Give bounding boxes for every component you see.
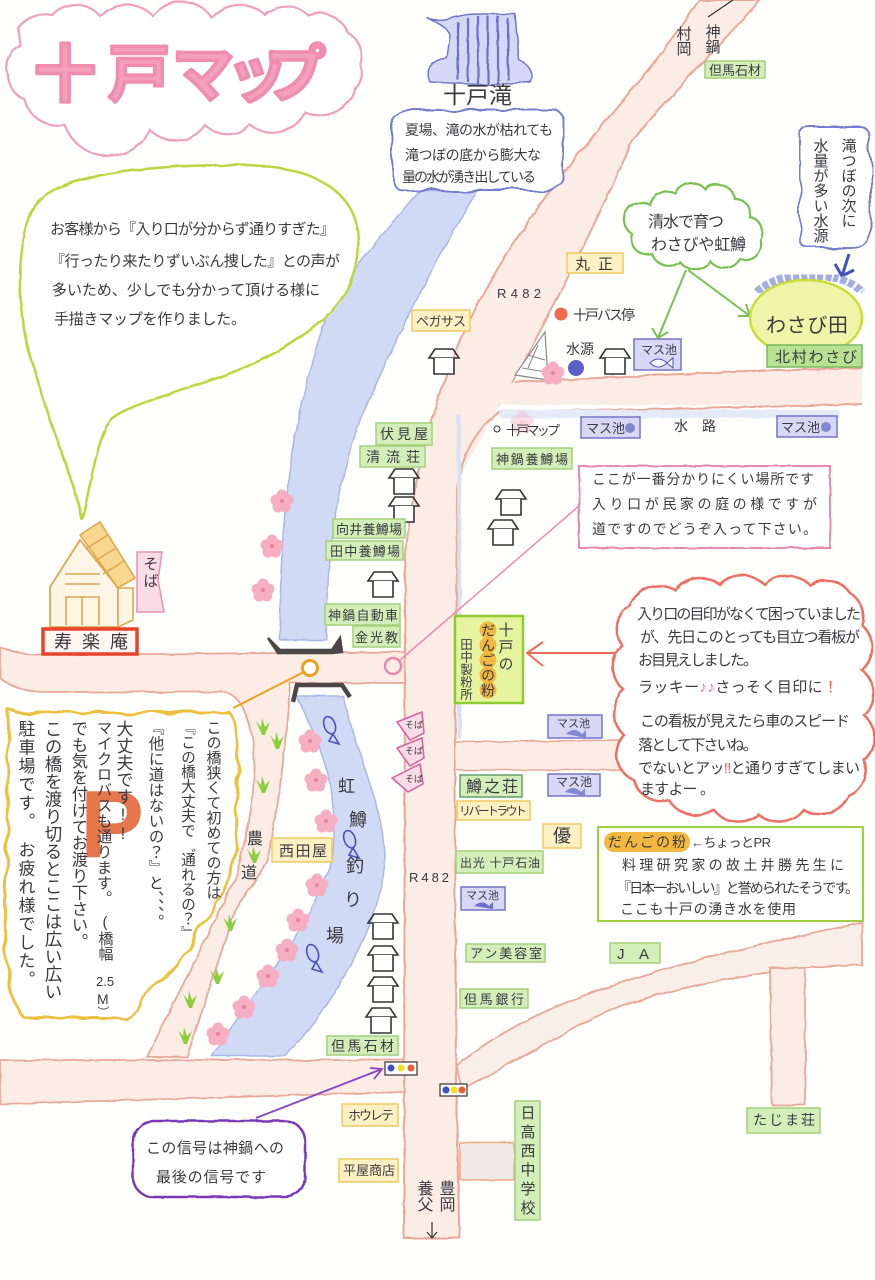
label: 伏見屋 <box>376 423 432 445</box>
grass sprigs <box>178 718 284 1044</box>
pink pointer <box>385 505 580 674</box>
label: ペガサス <box>412 310 470 331</box>
blue bubble: second water source: 滝つぼの次に <box>840 138 856 228</box>
yellow bubble: この橋を渡り切るとここは広い広い <box>43 720 63 1000</box>
dango flour sign: だんごの粉 <box>480 623 496 698</box>
yellow bubble: 『この橋大丈夫で゛通れるの？』 <box>179 720 195 940</box>
PR box: 料理研究家の故土井勝先生に <box>622 857 844 873</box>
yellow bubble: ） <box>96 1006 110 1018</box>
restaurant Jurakuan: 寿楽庵 <box>54 632 128 652</box>
label: マス池 lower: マス池 <box>466 889 499 902</box>
red callout cloud: 入り口の目印がなくて困っていました <box>637 606 861 623</box>
fishing spot label: 鱒 <box>349 810 367 830</box>
label: マス池 cross road north <box>548 715 602 738</box>
label: ペガサス: ペガサス <box>416 314 466 329</box>
cherry blossoms upper <box>252 490 294 602</box>
label: たじま荘 <box>747 1108 820 1133</box>
branch road to wasabi field <box>458 368 862 480</box>
pink note box: 道ですのでどうぞ入って下さい。 <box>592 521 817 537</box>
arrows from cloud <box>652 270 750 338</box>
dango flour sign: 十戸の <box>496 622 514 673</box>
label: 但馬銀行 <box>460 989 528 1008</box>
restaurant Jurakuan: そば <box>142 556 158 590</box>
label: アン美容室: アン美容室 <box>470 946 542 961</box>
label: 神鍋養鱒場: 神鍋養鱒場 <box>496 452 568 467</box>
callout: waterfall note: 量の水が湧き出している <box>402 169 536 185</box>
house <box>429 349 459 374</box>
label: 平屋商店 <box>339 1159 398 1182</box>
PR box: ここも十戸の湧き水を使用 <box>620 901 796 917</box>
waterfall name: 十戸滝 <box>443 82 512 108</box>
red callout cloud: が、先日このとっても目立つ看板が <box>640 629 860 646</box>
direction to Kannabe: 神鍋 <box>704 24 720 54</box>
label: マス池 cross road south: マス池 <box>556 775 592 789</box>
PR box: ←ちょっとPR <box>691 835 771 850</box>
red callout cloud: 落として下さいね。 <box>638 737 758 754</box>
pink note box <box>579 466 830 548</box>
label: マス池 upper <box>634 339 681 370</box>
houses row <box>366 914 398 1033</box>
label: 出光 十戸石油: 出光 十戸石油 <box>460 856 540 870</box>
cloud: spring water: 清水で育つ <box>648 213 724 231</box>
label: 清流荘: 清流荘 <box>366 449 420 465</box>
purple callout <box>133 1121 305 1197</box>
south direction: 養父 <box>414 1180 434 1212</box>
label: 但馬石材 top: 但馬石材 <box>709 63 761 78</box>
十戸マップ marker <box>494 410 560 438</box>
south direction: 豊岡 <box>436 1180 456 1213</box>
label: マス池 east: マス池 <box>781 420 820 435</box>
label: 金光教 <box>353 626 400 647</box>
label: マス池 cross road north: マス池 <box>557 717 590 730</box>
waterfall icon <box>427 14 532 85</box>
direction to Kannabe <box>674 0 733 57</box>
fish in river <box>304 715 359 972</box>
label: ホウレテ: ホウレテ <box>348 1108 394 1123</box>
label: マス池 east <box>777 416 837 437</box>
label: マス池 upper: マス池 <box>641 343 677 357</box>
label: 清流荘 <box>360 446 425 467</box>
label: 優 <box>543 824 581 848</box>
十戸マップ marker: 十戸マップ <box>506 423 560 438</box>
cloud: spring water <box>624 183 762 270</box>
label: 北村わさび <box>767 345 862 367</box>
label: 神鍋自動車 <box>325 604 400 625</box>
label: JA <box>610 943 660 963</box>
label: 神鍋自動車: 神鍋自動車 <box>328 608 398 623</box>
branch to school <box>460 1143 514 1180</box>
cherry blossoms lower <box>206 730 338 1046</box>
farm road label: 農 <box>247 830 263 848</box>
callout: waterfall note <box>393 110 563 190</box>
label: リバートラウト: リバートラウト <box>459 804 527 818</box>
purple arrow <box>256 1068 382 1118</box>
east cross road <box>455 740 620 770</box>
callout: waterfall note: 夏場、滝の水が枯れても <box>405 122 553 138</box>
dango flour sign <box>455 616 523 703</box>
road label R482 north: R482 <box>497 286 541 301</box>
south-east road <box>456 922 862 1090</box>
callout: waterfall note: 滝つぼの底から膨大な <box>405 147 541 163</box>
blue bubble: second water source <box>800 127 870 249</box>
speech balloon: intro: 多いため、少しでも分かって頂ける様に <box>52 281 320 299</box>
label: リバートラウト <box>457 801 530 820</box>
restaurant Jurakuan <box>43 522 164 654</box>
purple callout: 最後の信号です <box>156 1169 266 1186</box>
soba flags: そば <box>405 774 423 784</box>
label: ホウレテ <box>342 1104 398 1126</box>
label: 丸正 <box>567 253 623 273</box>
fishing spot label: 虹 <box>338 777 355 796</box>
label: 但馬銀行: 但馬銀行 <box>464 992 524 1007</box>
label: 鱒之荘: 鱒之荘 <box>466 778 518 796</box>
branch to Tajimaso <box>770 968 805 1105</box>
orange pointer <box>233 660 318 708</box>
label: 向井養鱒場: 向井養鱒場 <box>336 522 402 537</box>
fishing spot label <box>326 777 367 946</box>
label: 出光 十戸石油 <box>456 851 543 873</box>
road label R482 south: R482 <box>409 870 449 885</box>
title text: 十戸マップ <box>34 24 326 114</box>
red arrow <box>527 642 618 666</box>
wasabi field: わさび田 <box>766 314 848 337</box>
arrow to wasabi field <box>835 254 854 276</box>
red callout cloud: この看板が見えたら車のスピード <box>640 713 850 730</box>
PR box: だんごの粉 <box>608 834 686 850</box>
fishing spot label: 場 <box>326 926 344 946</box>
label: マス池 lower <box>461 887 505 910</box>
label: 神鍋養鱒場 <box>492 448 572 469</box>
label: 鱒之荘 <box>460 775 522 797</box>
label: マス池 cross road south <box>548 774 600 796</box>
pink note box: ここが一番分かりにくい場所です <box>592 471 814 487</box>
label: 金光教: 金光教 <box>355 630 398 645</box>
yellow bubble: 2.5 <box>96 974 114 989</box>
PR box <box>598 827 863 921</box>
soba flags: そば <box>405 746 423 756</box>
west road to Jurakuan <box>0 648 405 1057</box>
school label <box>515 1101 540 1220</box>
yellow bubble: M <box>97 991 109 1007</box>
label: 但馬石材: 但馬石材 <box>331 1038 394 1054</box>
yellow bubble: 『他に道はないの？』と、、、。 <box>146 720 164 929</box>
traffic signal west <box>385 1062 417 1075</box>
red callout cloud: ますよー 。 <box>640 781 715 798</box>
pink note box: 入り口が民家の庭の様ですが <box>592 496 817 512</box>
fishing spot label: 釣 <box>346 856 364 876</box>
label: 丸正: 丸正 <box>575 256 613 273</box>
speech balloon: intro: 手描きマップを作りました。 <box>54 311 246 328</box>
soba flags: そば <box>405 720 423 730</box>
river <box>212 190 840 1056</box>
yellow bubble <box>5 712 237 1018</box>
purple callout: この信号は神鍋への <box>146 1140 284 1157</box>
label: 伏見屋: 伏見屋 <box>380 426 428 442</box>
red callout cloud <box>613 576 874 822</box>
yellow bubble: マイクロバスも通ります。 <box>94 720 112 906</box>
speech balloon: intro: 『行ったり来たりずいぶん捜した』との声が <box>50 252 340 270</box>
waterway: 水 路 <box>674 418 716 434</box>
farm road label: 道 <box>241 864 257 882</box>
bottom west road <box>0 1060 404 1104</box>
soba flags <box>392 712 424 792</box>
label: 西田屋: 西田屋 <box>279 843 327 860</box>
main road R482 <box>404 0 760 1238</box>
speech balloon: intro: お客様から『入り口が分からず通りすぎた』 <box>50 221 335 238</box>
fence and source: 水源 <box>566 341 594 357</box>
bus stop: 十戸バス停 <box>573 307 635 323</box>
yellow bubble: でも気を付けてお渡り下さい。 <box>69 720 88 950</box>
label: 北村わさび: 北村わさび <box>775 349 857 366</box>
label: たじま荘: たじま荘 <box>753 1112 815 1128</box>
title cloud <box>7 2 362 156</box>
wasabi field <box>750 275 862 356</box>
label: マス池 waterway <box>581 417 640 438</box>
school label: 日高西中学校 <box>518 1105 536 1219</box>
label: 平屋商店: 平屋商店 <box>343 1163 395 1178</box>
farm road label <box>241 830 263 882</box>
fence and source <box>515 332 594 384</box>
dango flour sign: 田中製粉所 <box>458 638 472 700</box>
cloud: spring water: わさびや虹鱒 <box>651 236 746 254</box>
fishing spot label: り <box>344 890 362 910</box>
label: 田中養鱒場: 田中養鱒場 <box>330 544 400 559</box>
label: 優: 優 <box>553 826 571 846</box>
red callout cloud: お目見えしました。 <box>638 652 758 669</box>
PR box: 『日本一おいしい』と誉められたそうです。 <box>617 880 859 896</box>
yellow bubble: (橋幅 <box>96 914 114 961</box>
yellow bubble: 駐車場です。 お疲れ様でした。 <box>16 720 35 989</box>
traffic signal east <box>440 1084 467 1096</box>
bridge lower <box>293 685 350 702</box>
speech balloon: intro <box>20 165 358 520</box>
yellow bubble: 大丈夫です!! <box>114 720 133 843</box>
red callout cloud: ラッキー♪♪さっそく目印に！ <box>638 679 838 696</box>
label: 西田屋 <box>272 838 332 862</box>
yellow bubble: この橋狭くて初めての方は <box>204 720 222 900</box>
parking icon: P <box>80 771 144 878</box>
south direction <box>414 1180 456 1238</box>
house <box>600 349 630 374</box>
label: マス池 waterway: マス池 <box>586 421 625 436</box>
bridge upper <box>268 638 342 653</box>
red callout cloud: でないとアッ!!と通りすぎてしまい <box>638 760 860 777</box>
blue bubble: second water source: 水量が多い水源 <box>812 138 828 243</box>
houses <box>368 469 526 597</box>
label: JA: JA <box>617 946 649 963</box>
direction to Kannabe: 村岡 <box>674 26 692 57</box>
